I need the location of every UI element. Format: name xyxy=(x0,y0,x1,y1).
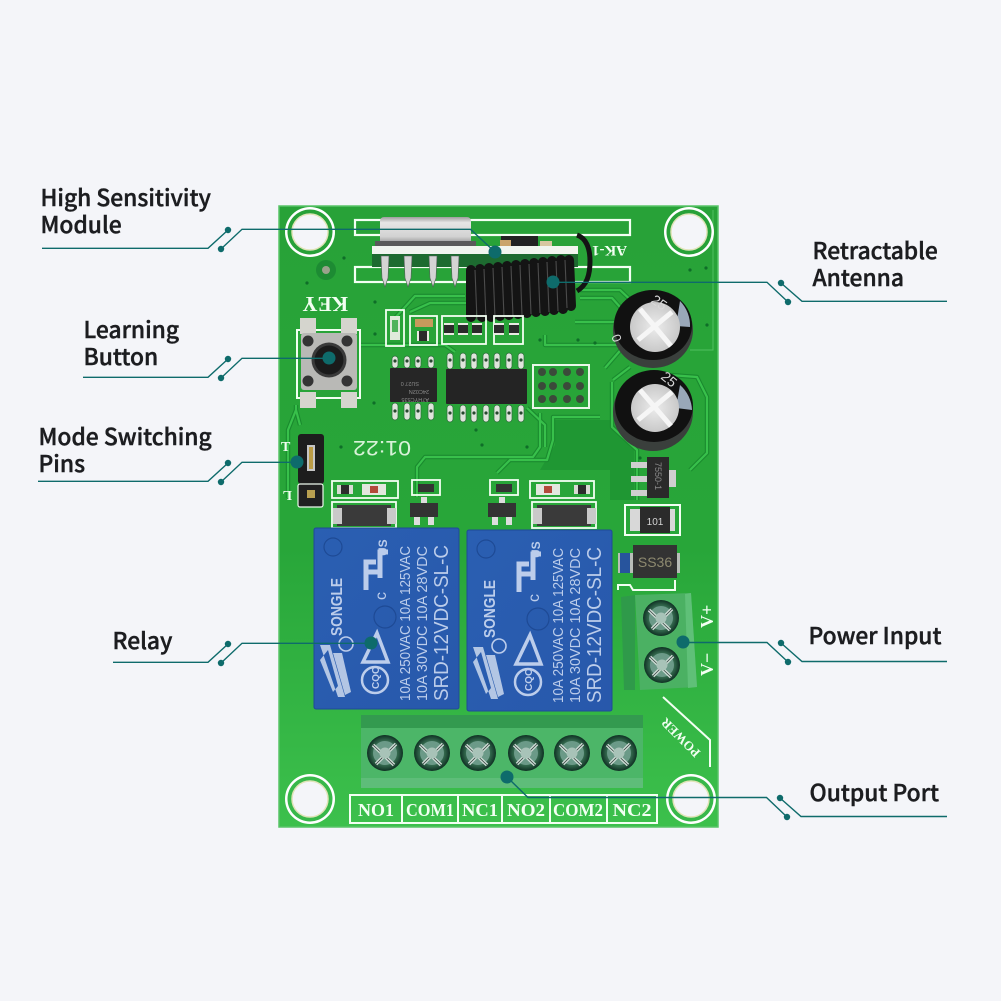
relay 2: CQC xyxy=(524,669,535,691)
callout: Output Port xyxy=(500,770,947,820)
icon: mode switching jumper xyxy=(281,434,324,507)
icon: electrolytic capacitor 2: 25 xyxy=(658,368,680,390)
relay 2: c xyxy=(526,594,543,602)
panel: green circuit board xyxy=(279,206,718,827)
icon: electrolytic capacitor 2 xyxy=(613,368,693,451)
icon: resistor 101: 101 xyxy=(647,517,664,528)
callout: Relay xyxy=(112,623,378,666)
output port label strip: NO1 xyxy=(358,800,394,820)
callout: Power Input: Power Input xyxy=(808,618,941,651)
icon: SS36 diode xyxy=(618,545,680,590)
icon: output port terminal block xyxy=(361,715,643,788)
callout: Learning Button: Button xyxy=(84,339,158,372)
callout: Power Input xyxy=(676,618,947,665)
relay 1: CQC xyxy=(371,667,382,689)
icon: SS36 diode: SS36 xyxy=(638,554,672,570)
small SMD components row xyxy=(386,310,523,346)
silkscreen: POWER label: POWER xyxy=(657,715,703,760)
output port label strip: NC2 xyxy=(612,800,652,820)
output port label strip: COM1 xyxy=(406,800,454,820)
callout: Retractable Antenna: Retractable xyxy=(812,233,938,266)
callout: Mode Switching Pins: Mode Switching xyxy=(38,419,212,452)
callout: High Sensitivity Module xyxy=(40,180,502,258)
silkscreen: V+ V- labels: V− xyxy=(697,653,717,676)
relay 2: SONGLE xyxy=(482,580,499,638)
integrated circuits: A7HYC535 xyxy=(401,396,429,402)
callout: High Sensitivity Module: Module xyxy=(40,207,122,240)
icon: mode switching jumper: L xyxy=(283,487,292,502)
integrated circuits: SU27 0 xyxy=(401,380,419,386)
callout: Relay: Relay xyxy=(112,623,173,656)
output port label strip: COM2 xyxy=(553,800,603,820)
relay 1 xyxy=(314,528,459,709)
integrated circuits: 24C02N xyxy=(409,388,429,394)
relay 1: 10A 30VDC 10A 28VDC xyxy=(414,546,431,701)
silkscreen: antenna pads and board code: AK-1 xyxy=(592,242,627,258)
icon: electrolytic capacitor 1 xyxy=(608,290,693,368)
integrated circuits xyxy=(390,353,527,422)
right relay driver group xyxy=(488,480,596,528)
icon: voltage regulator: 7550-1 xyxy=(653,462,663,490)
callout: Retractable Antenna xyxy=(546,233,947,305)
icon: mode switching jumper: T xyxy=(281,440,291,455)
board date mark: 01:22 xyxy=(353,436,411,459)
silkscreen: V+ V- labels: V+ xyxy=(697,605,717,628)
silkscreen: KEY label: KEY xyxy=(302,292,348,316)
relay 2: US xyxy=(529,541,543,558)
callout: Learning Button: Learning xyxy=(84,312,179,345)
silkscreen: antenna pads and board code xyxy=(355,220,630,282)
icon: learning button xyxy=(297,318,360,408)
relay 1: SRD-12VDC-SL-C xyxy=(431,545,453,701)
callout: Learning Button xyxy=(83,312,336,381)
output port label strip: NO2 xyxy=(507,800,545,820)
pad matrix xyxy=(533,365,589,408)
silkscreen: V+ V- labels xyxy=(697,605,717,676)
icon: electrolytic capacitor 1: 25 xyxy=(648,291,670,314)
icon: retractable antenna coil xyxy=(471,235,590,320)
icon: voltage regulator xyxy=(631,457,676,498)
callout: High Sensitivity Module: High Sensitivity xyxy=(40,180,212,213)
callout: Mode Switching Pins: Pins xyxy=(38,446,85,479)
icon: resistor 101 xyxy=(625,505,680,535)
output port label strip xyxy=(350,795,657,823)
callout: Output Port: Output Port xyxy=(810,775,939,808)
relay 2: 10A 250VAC 10A 125VAC xyxy=(550,548,567,703)
callout: Retractable Antenna: Antenna xyxy=(812,260,904,293)
relay 2 xyxy=(467,530,612,711)
mounting holes xyxy=(285,207,716,824)
icon: RF receiver module with crystal xyxy=(372,217,578,287)
relay 1: c xyxy=(373,592,390,600)
relay 2: SRD-12VDC-SL-C xyxy=(584,547,606,703)
icon: power input terminal xyxy=(621,593,697,690)
relay 2: 10A 30VDC 10A 28VDC xyxy=(567,548,584,703)
icon: electrolytic capacitor 1: 0 xyxy=(608,332,625,344)
relay 1: 10A 250VAC 10A 125VAC xyxy=(397,546,414,701)
left relay driver group xyxy=(332,480,440,528)
silkscreen: POWER label xyxy=(657,697,710,767)
relay 1: US xyxy=(376,539,390,556)
callout: Mode Switching Pins xyxy=(38,419,304,485)
output port label strip: NC1 xyxy=(462,800,498,820)
relay 1: SONGLE xyxy=(329,578,346,636)
